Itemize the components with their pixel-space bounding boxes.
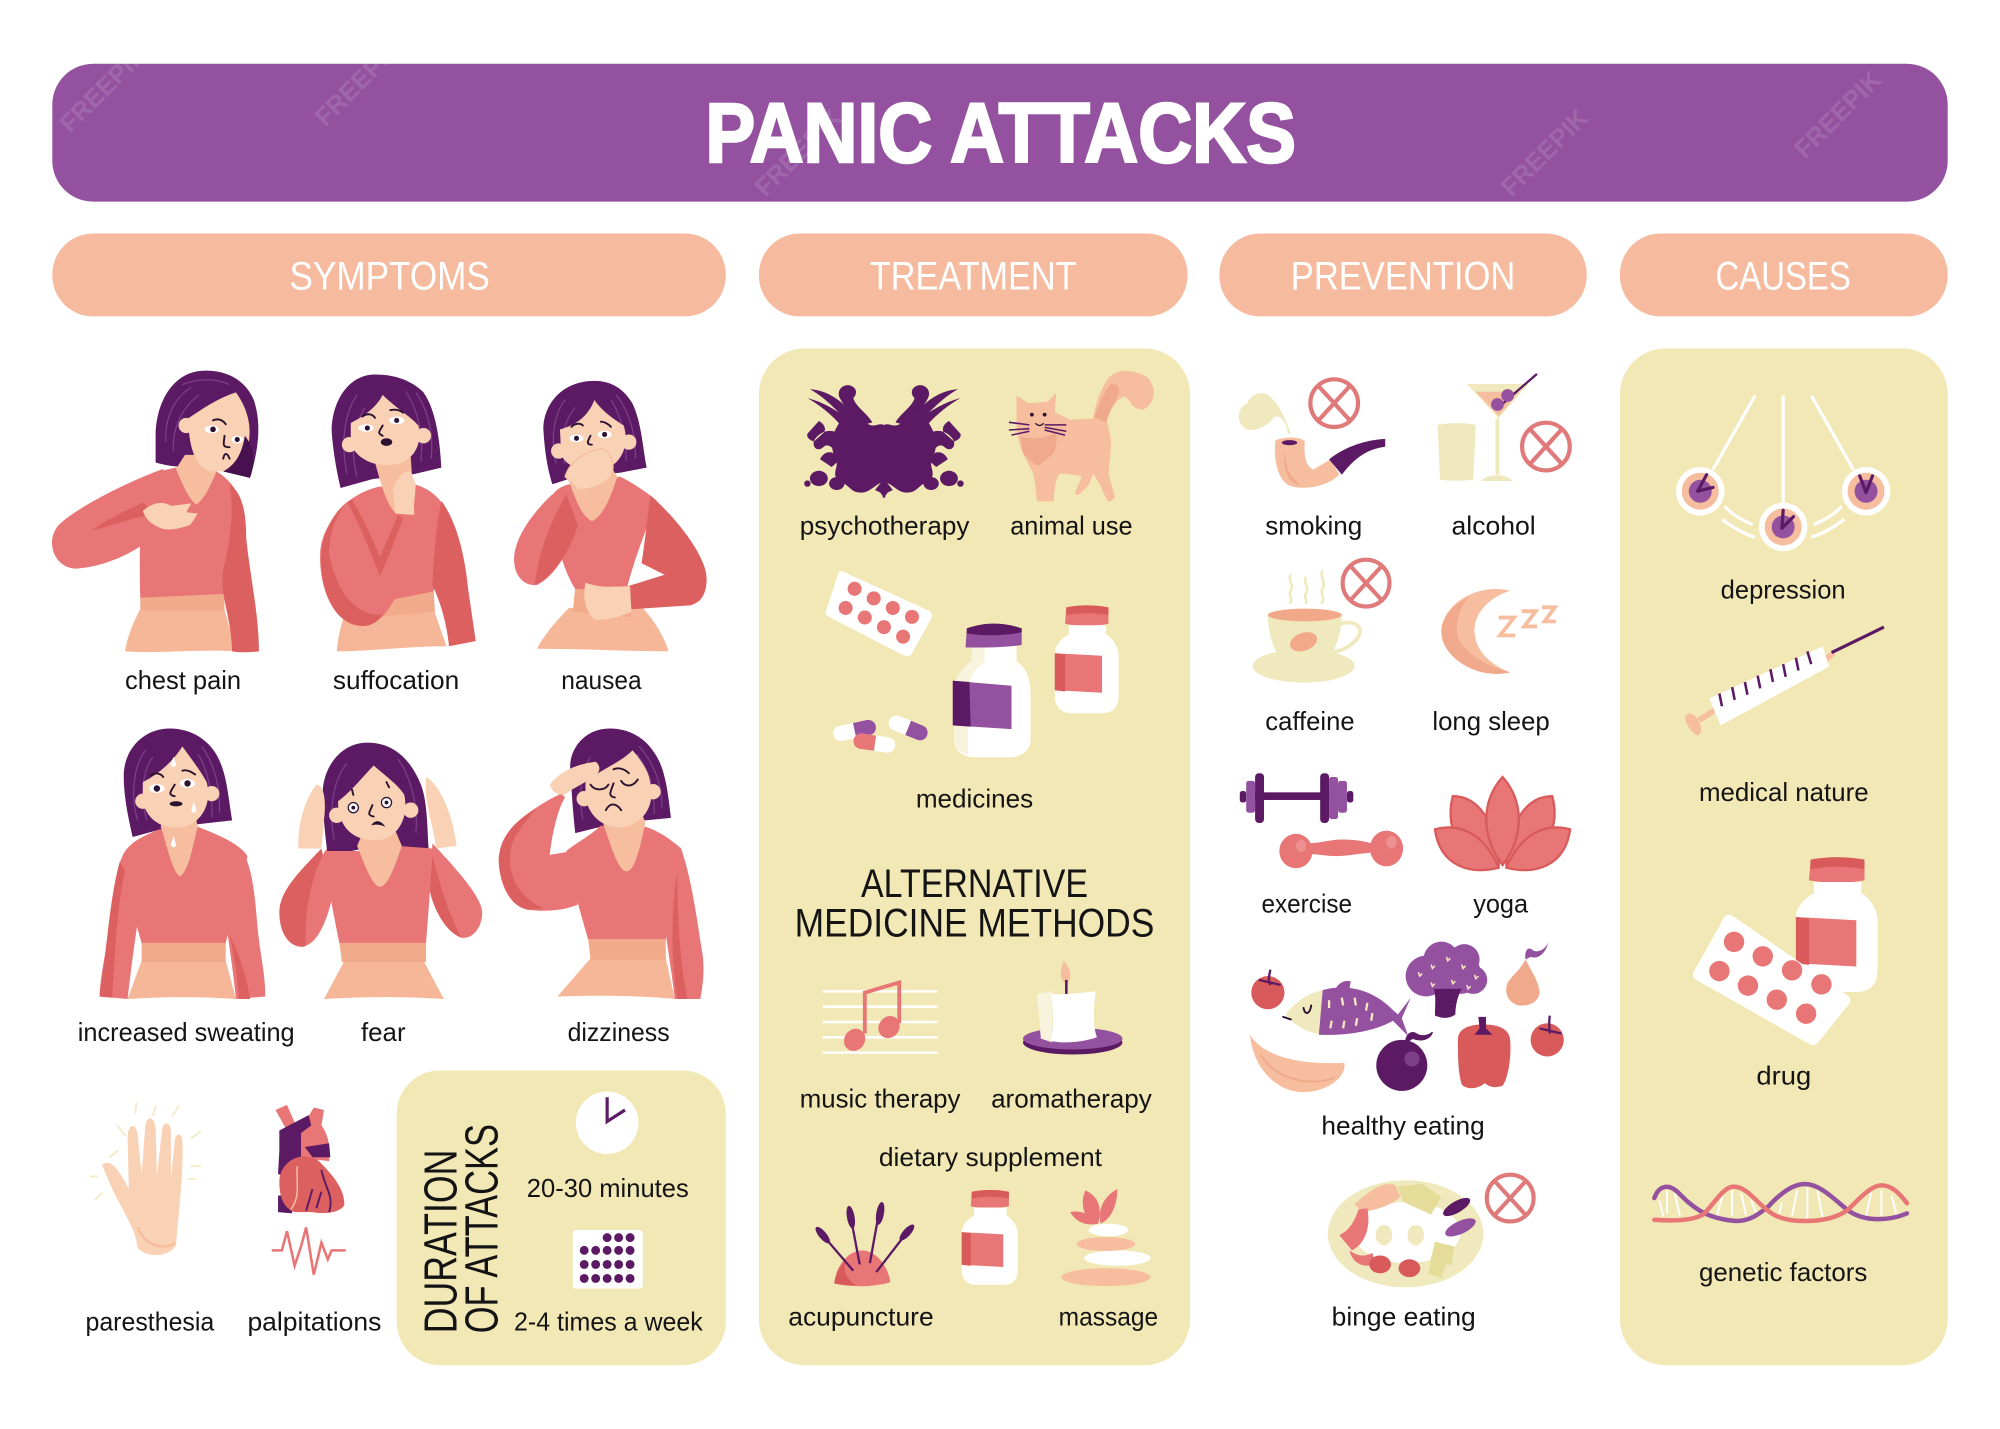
icon: tingling hand bbox=[91, 1104, 200, 1255]
panel: prevention bbox=[1239, 374, 1570, 1332]
figure: increased sweating bbox=[99, 729, 265, 999]
heading pill: symptoms: SYMPTOMS bbox=[290, 255, 490, 299]
heading pill: treatment bbox=[759, 233, 1188, 316]
panel: symptoms bbox=[52, 371, 726, 1365]
icon: prohibited sign bbox=[1310, 379, 1358, 427]
icon: binge eating plate bbox=[1328, 1180, 1483, 1287]
icon: coffee cup bbox=[1253, 570, 1360, 683]
heading pill: prevention bbox=[1219, 233, 1587, 316]
title: PANIC ATTACKS bbox=[705, 86, 1296, 180]
icon: spa stones bbox=[1061, 1189, 1151, 1286]
panel: causes bbox=[1620, 348, 1948, 1365]
icon: dumbbell bbox=[1279, 831, 1403, 868]
label: fear: fear bbox=[361, 1019, 406, 1047]
icon: inkblot bbox=[804, 385, 964, 498]
label: genetic factors: genetic factors bbox=[1699, 1259, 1867, 1287]
label: dizziness: dizziness bbox=[568, 1019, 670, 1047]
heading pill: symptoms bbox=[52, 233, 726, 316]
icon: candle bbox=[1023, 961, 1122, 1055]
icon: acupuncture needles bbox=[813, 1201, 917, 1286]
label: drug: drug bbox=[1756, 1063, 1811, 1091]
label: 2-4 times a week: 2-4 times a week bbox=[514, 1309, 703, 1337]
icon: music note bbox=[823, 982, 938, 1055]
icon: healthy food group bbox=[1250, 942, 1564, 1092]
heading pill: prevention: PREVENTION bbox=[1291, 255, 1515, 299]
heading: alternative medicine methods: ALTERNATIVE bbox=[861, 862, 1088, 906]
panel: treatment bbox=[759, 348, 1190, 1365]
icon: purple medicine bottle bbox=[953, 624, 1031, 757]
header banner: FREEPIK bbox=[1789, 65, 1888, 164]
icon: smoking pipe bbox=[1239, 393, 1385, 488]
figure: fear bbox=[279, 743, 482, 999]
heading pill: causes bbox=[1620, 233, 1948, 316]
label: yoga: yoga bbox=[1473, 890, 1529, 918]
icon: barbell bbox=[1240, 773, 1353, 823]
icon: moon and zzz bbox=[1441, 589, 1556, 674]
label: animal use: animal use bbox=[1010, 513, 1133, 541]
icon: pill blister bbox=[826, 571, 932, 657]
header banner: FREEPIK bbox=[750, 104, 848, 202]
icon: red medicine bottle bbox=[1055, 605, 1119, 713]
icon: prohibited sign bbox=[1343, 560, 1389, 607]
icon: prohibited sign bbox=[1522, 423, 1570, 470]
label: palpitations: palpitations bbox=[247, 1309, 381, 1337]
heading: duration of attacks: DURATION bbox=[415, 1150, 467, 1333]
label: psychotherapy: psychotherapy bbox=[800, 513, 970, 541]
panel: duration of attacks bbox=[397, 1070, 726, 1365]
label: nausea: nausea bbox=[561, 667, 642, 695]
figure: nausea bbox=[514, 381, 707, 651]
label: acupuncture: acupuncture bbox=[788, 1304, 934, 1332]
label: exercise: exercise bbox=[1261, 890, 1352, 918]
icon: clock bbox=[576, 1092, 638, 1154]
header banner: FREEPIK bbox=[55, 40, 153, 138]
heading: alternative medicine methods bbox=[795, 862, 1154, 946]
figure: chest pain bbox=[52, 371, 259, 652]
label: dietary supplement: dietary supplement bbox=[879, 1144, 1102, 1172]
icon: hypnosis pendulum bbox=[1676, 396, 1890, 551]
icon: capsules bbox=[832, 713, 930, 754]
label: binge eating: binge eating bbox=[1332, 1304, 1476, 1332]
label: alcohol: alcohol bbox=[1452, 513, 1536, 541]
label: paresthesia: paresthesia bbox=[85, 1309, 215, 1337]
label: massage: massage bbox=[1059, 1304, 1158, 1332]
icon: cat bbox=[1009, 371, 1154, 501]
header banner: FREEPIK bbox=[1496, 104, 1594, 202]
icon: heart with pulse bbox=[272, 1105, 346, 1275]
label: 20-30 minutes: 20-30 minutes bbox=[527, 1175, 689, 1203]
figure: dizziness bbox=[499, 729, 703, 999]
icon: bottle and blister bbox=[1693, 857, 1878, 1045]
label: aromatherapy: aromatherapy bbox=[991, 1085, 1152, 1113]
label: chest pain: chest pain bbox=[125, 667, 241, 695]
header banner bbox=[52, 33, 1948, 202]
label: suffocation: suffocation bbox=[333, 667, 459, 695]
heading: duration of attacks: OF ATTACKS bbox=[455, 1124, 507, 1333]
heading: duration of attacks bbox=[415, 1124, 507, 1333]
label: depression: depression bbox=[1721, 576, 1846, 604]
icon: lotus bbox=[1435, 777, 1570, 870]
label: long sleep: long sleep bbox=[1432, 708, 1550, 736]
label: medical nature: medical nature bbox=[1699, 779, 1869, 807]
icon: supplement bottle bbox=[962, 1190, 1018, 1285]
label: music therapy: music therapy bbox=[800, 1085, 961, 1113]
icon: calendar dots bbox=[573, 1230, 643, 1289]
header banner: FREEPIK bbox=[310, 33, 408, 132]
heading pill: causes: CAUSES bbox=[1716, 255, 1851, 299]
icon: alcohol glasses bbox=[1438, 374, 1537, 481]
icon: dna strand bbox=[1654, 1184, 1907, 1221]
label: healthy eating: healthy eating bbox=[1321, 1112, 1485, 1140]
label: smoking: smoking bbox=[1265, 513, 1362, 541]
label: increased sweating: increased sweating bbox=[78, 1019, 295, 1047]
label: caffeine: caffeine bbox=[1265, 708, 1355, 736]
heading: alternative medicine methods: MEDICINE METHODS bbox=[795, 902, 1154, 946]
icon: syringe bbox=[1685, 627, 1884, 736]
label: medicines: medicines bbox=[916, 786, 1033, 814]
heading pill: treatment: TREATMENT bbox=[870, 255, 1077, 299]
icon: prohibited sign bbox=[1487, 1175, 1534, 1221]
figure: suffocation bbox=[320, 374, 476, 651]
